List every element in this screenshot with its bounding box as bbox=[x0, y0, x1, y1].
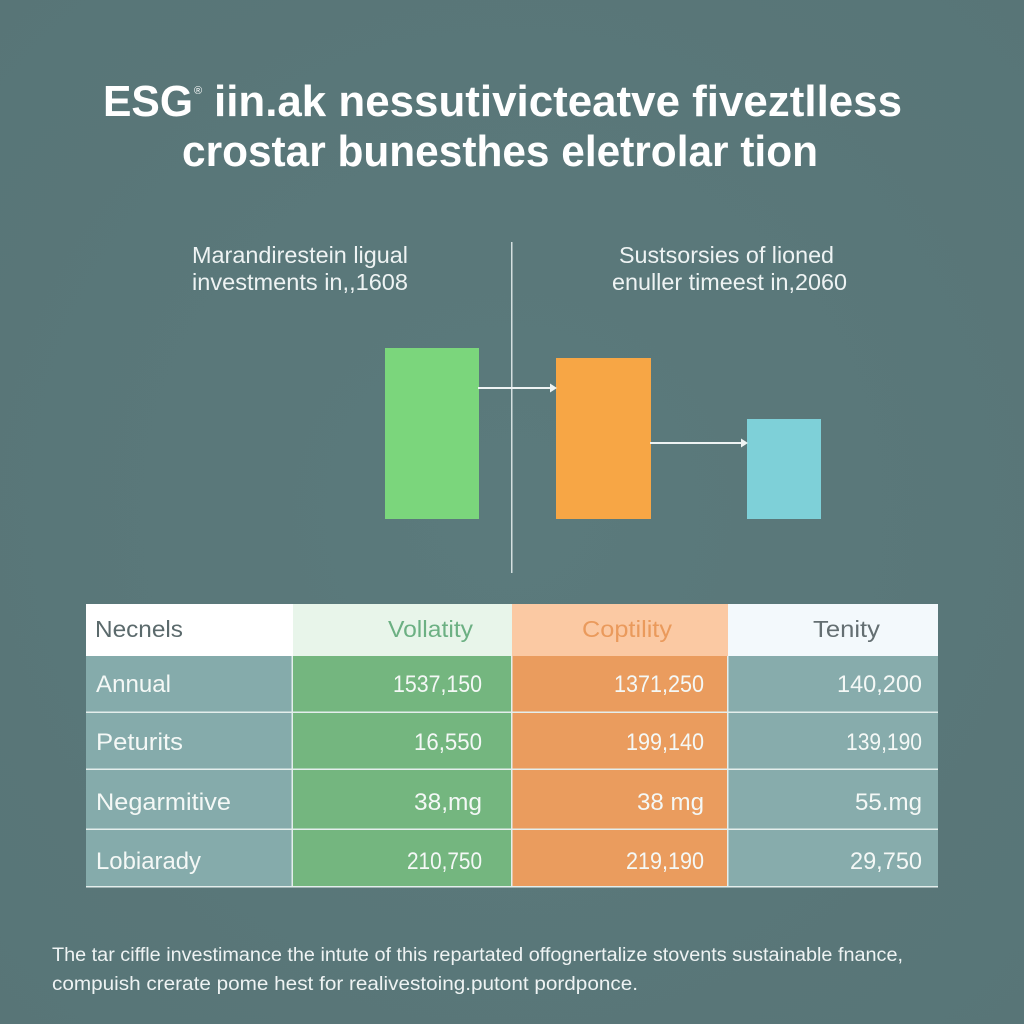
bar: light blue bbox=[747, 419, 821, 519]
title: ESG bbox=[103, 77, 193, 126]
table header row: Coptility bbox=[582, 616, 673, 642]
row: Peturits: 16,550 bbox=[414, 729, 482, 756]
row: Negarmitive bbox=[96, 789, 922, 816]
right subtitle: enuller timeest in,2060 bbox=[612, 269, 847, 295]
title: ® bbox=[194, 85, 202, 97]
title bbox=[103, 77, 902, 176]
row: Annual: Annual bbox=[96, 671, 171, 698]
table body cells bbox=[86, 656, 938, 887]
row: Lobiarady: 219,190 bbox=[626, 848, 704, 875]
row: Peturits bbox=[96, 729, 922, 756]
row: Peturits: 139,190 bbox=[846, 729, 922, 756]
title: crostar bunesthes eletrolar tion bbox=[182, 127, 818, 176]
title: iin.ak nessutivicteatve fiveztlless bbox=[214, 77, 902, 126]
footer text bbox=[52, 945, 903, 995]
center divider line bbox=[511, 242, 512, 573]
footer text: compuish crerate pome hest for realivestoing.putont pordponce. bbox=[52, 974, 638, 995]
row: Peturits: 199,140 bbox=[626, 729, 704, 756]
row: Lobiarady: 29,750 bbox=[850, 848, 922, 875]
row: Lobiarady: 210,750 bbox=[407, 848, 482, 875]
row: Annual bbox=[96, 671, 922, 698]
bar: orange bbox=[556, 358, 651, 519]
row: Lobiarady bbox=[96, 848, 922, 875]
arrow: green to orange bbox=[478, 384, 557, 392]
bar: green bbox=[385, 348, 479, 519]
table header row: Vollatity bbox=[388, 616, 474, 642]
table header row: Necnels bbox=[95, 616, 183, 642]
row: Peturits: Peturits bbox=[96, 729, 183, 756]
table grid lines bbox=[86, 656, 938, 888]
left subtitle bbox=[192, 242, 408, 295]
right subtitle bbox=[612, 242, 847, 295]
row: Annual: 1371,250 bbox=[614, 671, 704, 698]
row: Annual: 1537,150 bbox=[393, 671, 482, 698]
data table bbox=[86, 604, 938, 888]
row: Negarmitive: 38,mg bbox=[414, 789, 482, 816]
table header row: Tenity bbox=[813, 616, 881, 642]
left subtitle: Marandirestein ligual bbox=[192, 242, 408, 268]
table header row bbox=[86, 604, 938, 656]
arrow: orange to blue bbox=[650, 438, 748, 448]
footer text: The tar ciffle investimance the intute of this repartated offognertalize stovents sustainable fnance, bbox=[52, 945, 903, 966]
row: Annual: 140,200 bbox=[837, 671, 922, 698]
row: Negarmitive: 38 mg bbox=[637, 789, 704, 816]
left subtitle: investments in,,1608 bbox=[192, 269, 408, 295]
row: Negarmitive: Negarmitive bbox=[96, 789, 231, 816]
right subtitle: Sustsorsies of lioned bbox=[619, 242, 834, 268]
row: Lobiarady: Lobiarady bbox=[96, 848, 201, 875]
row: Negarmitive: 55.mg bbox=[855, 789, 922, 816]
